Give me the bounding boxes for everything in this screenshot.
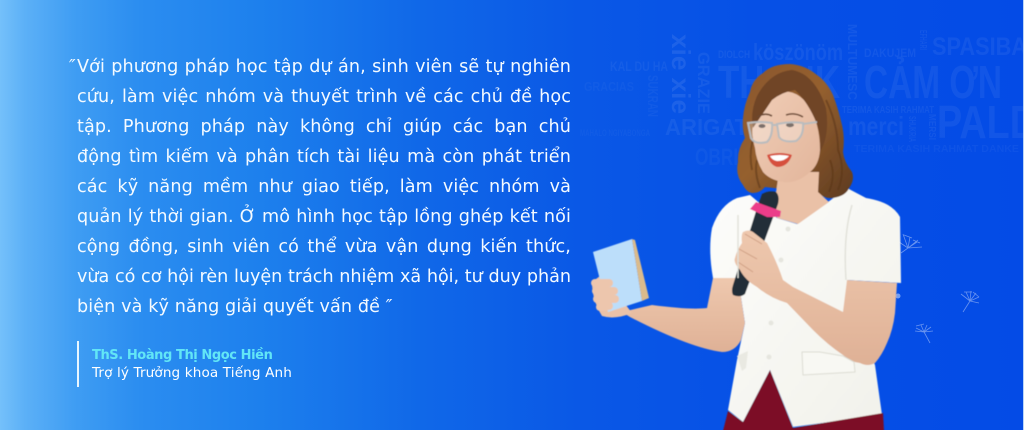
background word cloud: MERSI: [926, 114, 937, 140]
text: biện và kỹ năng giải quyết vấn đề ″: [77, 297, 392, 317]
buttons: [766, 226, 790, 360]
background word cloud: GRACIAS: [584, 79, 634, 94]
background word cloud: MAHALO NGIYABONGA: [580, 128, 650, 138]
text: vừa có cơ hội rèn luyện trách nhiệm xã hội, tư duy phản: [77, 267, 571, 287]
quote text: [69, 57, 571, 317]
background word cloud: OBRIGADO: [695, 144, 790, 171]
speaker name: ThS. Hoàng Thị Ngọc Hiền: [92, 348, 272, 363]
book spine: [632, 239, 649, 301]
background word cloud: xie xie: [666, 34, 696, 114]
image edge highlight: [1023, 0, 1024, 430]
pocket: [802, 352, 855, 375]
face: [752, 91, 820, 182]
attribution: [77, 341, 292, 387]
left arm: [622, 278, 745, 352]
hair fringe: [752, 70, 827, 152]
background word cloud: TERIMA KASIH RAHMAT: [842, 105, 934, 116]
background word cloud: ARIGATO: [665, 114, 765, 140]
fingers on the book: [595, 283, 615, 307]
background word cloud: köszönöm: [753, 39, 843, 65]
background word cloud: SUKRAN: [644, 75, 661, 117]
neck: [774, 172, 829, 224]
skirt: [723, 370, 884, 430]
text: cứu, làm việc nhóm và thuyết trình về các chủ đề học: [77, 87, 571, 107]
attribution bar: [77, 341, 79, 387]
left palm: [592, 276, 632, 317]
background word cloud: THANK: [718, 56, 840, 108]
right arm and hand: [735, 230, 897, 365]
text: cộng đồng, sinh viên có thể vừa vận dụng kiến thức,: [77, 237, 571, 257]
glasses: [748, 122, 817, 143]
text: các kỹ năng mềm như giao tiếp, làm việc nhóm và: [77, 177, 571, 197]
background word cloud: GRAZIE: [694, 52, 713, 114]
book: [593, 239, 642, 312]
text: Với phương pháp học tập dự án, sinh viên sẽ tự nghiên: [77, 57, 571, 77]
microphone ring: [750, 202, 781, 217]
background word cloud: KAL DU HA: [610, 58, 668, 74]
eyebrows and eyes: [757, 114, 803, 117]
text: tập. Phương pháp này không chỉ giúp các bạn chủ: [77, 117, 571, 137]
background word cloud: SHUKRIA: [906, 116, 917, 142]
mouth: [767, 153, 792, 167]
sleeve folds: [738, 205, 852, 280]
background word cloud: DAKUJEM: [864, 46, 916, 60]
text: ″: [69, 57, 76, 77]
hair strands: [751, 100, 842, 192]
text: quản lý thời gian. Ở mô hình học tập lồng ghép kết nối: [77, 207, 571, 227]
hair back: [737, 64, 853, 198]
background word cloud: EFHARI: [917, 30, 928, 50]
side panel: [737, 351, 748, 371]
text: động tìm kiếm và phân tích tài liệu mà còn phát triển: [77, 147, 571, 167]
speaker role: Trợ lý Trưởng khoa Tiếng Anh: [92, 365, 292, 381]
fingers over microphone: [738, 234, 762, 272]
microphone: [732, 191, 779, 296]
background word cloud: DIOLCH: [718, 49, 750, 61]
background word cloud: MULTUMESC: [845, 24, 860, 101]
blouse: [710, 188, 901, 427]
background word cloud: merci: [848, 111, 904, 141]
background word cloud: TERIMA KASIH RAHMAT DANKE: [854, 144, 1019, 155]
